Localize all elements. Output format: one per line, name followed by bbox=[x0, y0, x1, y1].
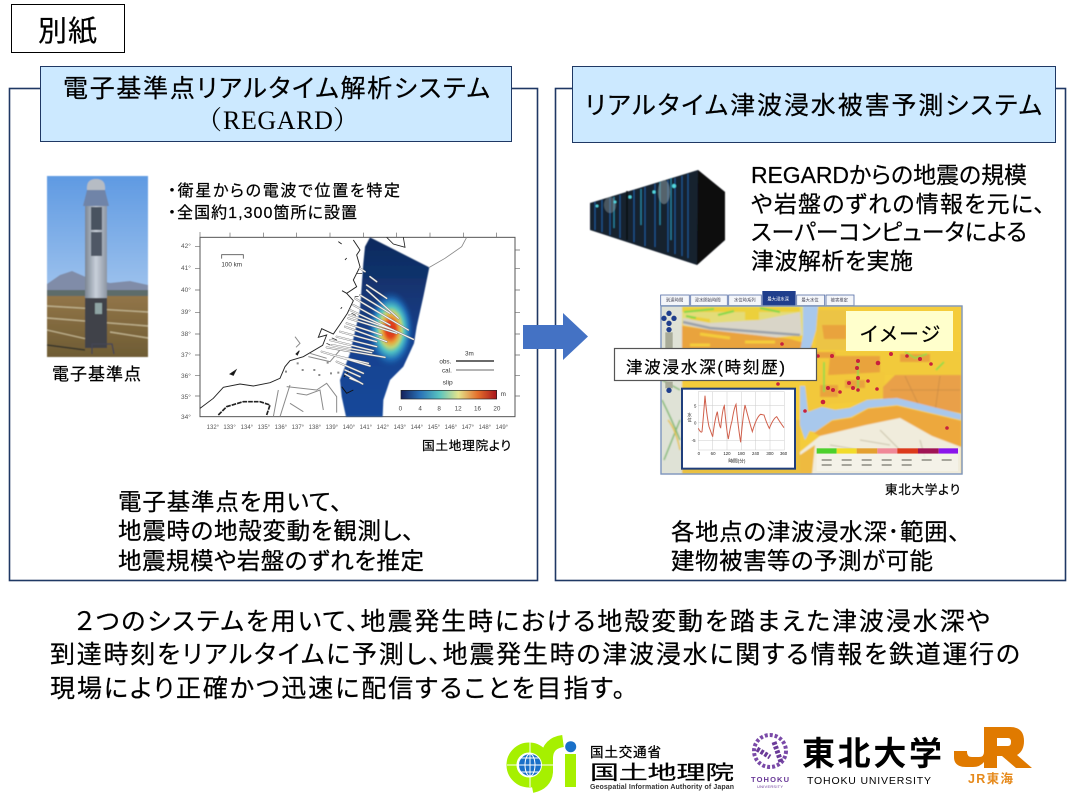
inset chart: water level: 360 bbox=[780, 451, 788, 456]
obs/cal legend: 3m bbox=[465, 350, 474, 357]
inset chart: water level: -5 bbox=[692, 438, 696, 443]
logo: Tohoku University: 東北大学 bbox=[802, 735, 942, 772]
source note: 国土地理院より bbox=[422, 439, 511, 453]
panel title: REGARD: 電子基準点リアルタイム解析システム bbox=[63, 75, 490, 103]
panel title: REGARD: REGARD bbox=[223, 106, 334, 135]
logo: JR Central bbox=[954, 727, 1032, 786]
feature bullets: ・衛星からの電波で位置を特定 bbox=[168, 182, 400, 200]
panel title: REGARD: （ bbox=[196, 106, 222, 135]
logo: Tohoku University: TOHOKU UNIVERSITY bbox=[807, 775, 931, 787]
central blocks bbox=[816, 352, 962, 402]
description text: 建物被害等の予測が可能 bbox=[671, 548, 933, 574]
chart: slip distribution map: 100 km bbox=[221, 262, 242, 269]
callout: inundation depth: 津波浸水深(時刻歴) bbox=[626, 358, 785, 377]
legend bar bbox=[817, 448, 958, 471]
description: REGARD input: 津波解析を実施 bbox=[751, 248, 913, 274]
panel title: REGARD: ） bbox=[333, 106, 359, 135]
displacement arrows bbox=[322, 268, 413, 384]
feature bullets bbox=[168, 182, 400, 222]
longitude labels: 138° bbox=[309, 425, 322, 431]
longitude labels: 144° bbox=[411, 425, 424, 431]
orange belt bbox=[682, 326, 812, 352]
map screenshot: tsunami inundation bbox=[614, 291, 962, 474]
latitude labels: 39° bbox=[181, 308, 191, 316]
longitude labels: 145° bbox=[428, 425, 441, 431]
red damage dots bbox=[776, 342, 949, 430]
longitude labels: 146° bbox=[445, 425, 458, 431]
photo: GNSS reference station bbox=[47, 176, 148, 357]
description: REGARD input bbox=[751, 162, 1045, 274]
logo: Tohoku University: UNIVERSITY bbox=[757, 784, 783, 789]
photo caption: 電子基準点 bbox=[52, 365, 141, 384]
image label bbox=[846, 311, 953, 351]
longitude labels bbox=[207, 425, 509, 431]
inset chart: water level: 240 bbox=[752, 451, 760, 456]
heading tag: 別紙: 別紙 bbox=[38, 15, 97, 48]
obs/cal legend bbox=[439, 350, 494, 386]
summary text: ２つのシステムを用いて、地震発生時における地殻変動を踏まえた津波浸水深や bbox=[75, 608, 990, 636]
latitude labels: 35° bbox=[181, 393, 191, 401]
chart: slip distribution map: m bbox=[501, 391, 506, 398]
description text: 電子基準点を用いて、 bbox=[118, 489, 342, 515]
description text bbox=[671, 519, 960, 574]
summary text: 現場により正確かつ迅速に配信することを目指す。 bbox=[50, 675, 625, 703]
scale bar bbox=[222, 255, 243, 259]
panel title: tsunami system bbox=[572, 66, 1056, 142]
longitude labels: 137° bbox=[292, 425, 305, 431]
latitude labels: 34° bbox=[181, 413, 191, 421]
heading tag: 別紙 bbox=[12, 4, 124, 52]
chart: slip distribution map: 12 bbox=[455, 406, 462, 413]
tabs bbox=[661, 291, 854, 306]
description text bbox=[118, 489, 424, 574]
inset chart: water level: 水 bbox=[687, 412, 692, 418]
obs/cal legend: slip bbox=[443, 379, 453, 386]
logo: GSI bbox=[507, 741, 734, 791]
icon: supercomputer bbox=[590, 170, 725, 265]
inset chart: water level: 0 bbox=[698, 451, 701, 456]
latitude labels: 36° bbox=[181, 372, 191, 380]
description: REGARD input: スーパーコンピュータによる bbox=[751, 219, 1027, 245]
chart: slip distribution map bbox=[181, 232, 520, 431]
tabs: 水位時系列 bbox=[734, 297, 756, 304]
logo: Tohoku University: TOHOKU bbox=[751, 775, 789, 784]
tabs: 最大水位 bbox=[801, 297, 819, 304]
chart: slip distribution map: 16 bbox=[474, 406, 482, 413]
feature bullets: ・全国約1,300箇所に設置 bbox=[168, 204, 357, 222]
logo: JR Central: JR東海 bbox=[968, 771, 1013, 786]
river north-south bbox=[800, 306, 818, 352]
upper district bbox=[682, 306, 805, 336]
river east-west bbox=[806, 398, 961, 432]
longitude labels: 133° bbox=[223, 425, 236, 431]
inset chart: water level: 位 bbox=[687, 417, 692, 423]
obs/cal legend: cal. bbox=[442, 367, 452, 374]
logo: GSI: Geospatial Information Authority of Japan bbox=[590, 784, 734, 791]
logo: GSI: 国土地理院 bbox=[590, 762, 734, 784]
latitude labels bbox=[181, 242, 191, 421]
summary text bbox=[50, 608, 1020, 703]
inset chart: water level: 60 bbox=[711, 451, 716, 456]
obs/cal legend: obs. bbox=[439, 358, 452, 365]
inset chart: water level: 300 bbox=[766, 451, 774, 456]
latitude labels: 42° bbox=[181, 242, 191, 250]
panel: tsunami prediction system bbox=[556, 66, 1066, 580]
description: REGARD input: REGARDからの地震の規模 bbox=[751, 162, 1027, 188]
logos bbox=[507, 727, 1032, 791]
longitude labels: 135° bbox=[258, 425, 271, 431]
tabs: 浸水開始時間 bbox=[695, 297, 721, 304]
chart: slip distribution map: 4 bbox=[418, 406, 422, 413]
longitude labels: 149° bbox=[496, 425, 509, 431]
longitude labels: 148° bbox=[479, 425, 492, 431]
logo: Tohoku University bbox=[751, 735, 942, 789]
longitude labels: 132° bbox=[207, 425, 220, 431]
latitude labels: 37° bbox=[181, 351, 191, 359]
longitude labels: 134° bbox=[241, 425, 254, 431]
chart: slip distribution map: 20 bbox=[493, 406, 501, 413]
longitude labels: 147° bbox=[462, 425, 475, 431]
coastlines bbox=[200, 237, 405, 415]
longitude labels: 136° bbox=[275, 425, 288, 431]
description text: 地震規模や岩盤のずれを推定 bbox=[118, 548, 424, 574]
inundation map base bbox=[661, 306, 962, 474]
inset chart: water level: 0 bbox=[694, 420, 697, 425]
eastern orange district bbox=[883, 375, 961, 413]
longitude labels: 141° bbox=[360, 425, 373, 431]
longitude labels: 140° bbox=[343, 425, 356, 431]
hills bbox=[800, 418, 961, 474]
tabs: 被害推定 bbox=[831, 297, 849, 304]
tabs: 到達時間 bbox=[666, 297, 683, 304]
longitude labels: 142° bbox=[377, 425, 390, 431]
colour bar bbox=[401, 390, 497, 399]
latitude labels: 38° bbox=[181, 330, 191, 338]
panel title: REGARD bbox=[40, 66, 512, 142]
panel title: tsunami system: リアルタイム津波浸水被害予測システム bbox=[585, 92, 1042, 120]
arrow: REGARD to tsunami system bbox=[523, 313, 588, 360]
panel: REGARD system bbox=[10, 66, 538, 580]
logo: GSI: 国土交通省 bbox=[590, 745, 661, 760]
longitude labels: 143° bbox=[394, 425, 407, 431]
inset chart: water level: 5 bbox=[694, 403, 697, 408]
south bank bbox=[814, 406, 961, 447]
label: イメージ: イメージ bbox=[860, 324, 940, 346]
description: REGARD input: や岩盤のずれの情報を元に、 bbox=[751, 191, 1045, 217]
longitude labels: 139° bbox=[326, 425, 339, 431]
latitude labels: 40° bbox=[181, 286, 191, 294]
inset chart: water level: 時間(分) bbox=[728, 458, 746, 465]
inset chart: water level: 120 bbox=[723, 451, 731, 456]
chart: slip distribution map: 0 bbox=[399, 406, 403, 413]
chart: slip distribution map: 8 bbox=[437, 406, 441, 413]
inset chart: water level: 180 bbox=[738, 451, 745, 456]
latitude labels: 41° bbox=[181, 264, 191, 272]
callout: inundation depth bbox=[614, 348, 816, 380]
inset chart: water level bbox=[682, 389, 795, 469]
source note: 東北大学より bbox=[885, 482, 960, 497]
tabs: 最大浸水深 bbox=[767, 295, 790, 302]
summary text: 到達時刻をリアルタイムに予測し、地震発生時の津波浸水に関する情報を鉄道運行の bbox=[50, 641, 1020, 669]
description text: 地震時の地殻変動を観測し、 bbox=[118, 518, 414, 544]
zoom control bbox=[661, 311, 677, 393]
description text: 各地点の津波浸水深･範囲、 bbox=[671, 519, 960, 545]
